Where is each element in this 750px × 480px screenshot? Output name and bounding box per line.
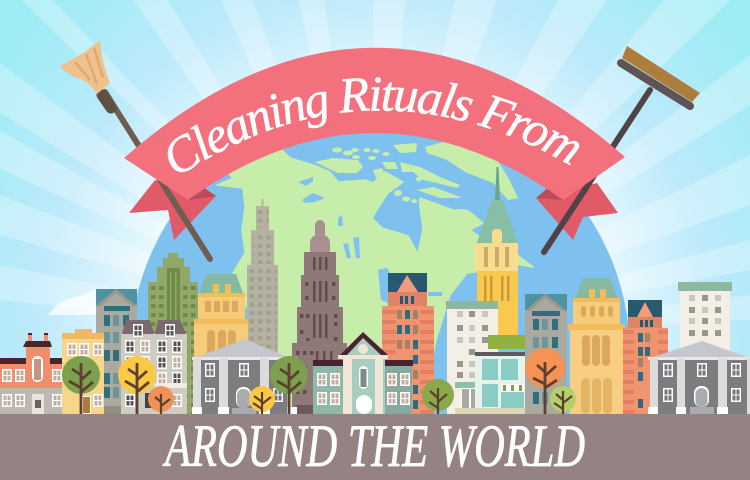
- ribbon tails: [129, 180, 618, 240]
- cloud: [48, 289, 96, 315]
- tree: green 1: [62, 356, 100, 414]
- lakes: [298, 177, 442, 303]
- building: yellow left: [194, 274, 248, 370]
- building: teal gray left: [96, 289, 137, 414]
- ground band: [0, 414, 750, 480]
- banner title: Cleaning Rituals From: [168, 77, 580, 172]
- tree: lime small: [550, 386, 576, 414]
- trees: [62, 348, 576, 414]
- building: yellow right: [568, 278, 625, 414]
- globe: [130, 104, 630, 414]
- house: salmon left: [0, 333, 75, 414]
- building: gray tall tower: [247, 199, 278, 355]
- house: green right wing: [385, 360, 413, 414]
- arctic islands: [315, 143, 462, 203]
- broom right: [544, 46, 700, 252]
- skyline: [0, 167, 750, 414]
- land: greenland: [425, 142, 518, 200]
- house: green left: [313, 360, 345, 414]
- house: yellow left: [62, 329, 104, 414]
- building: brown tower: [292, 220, 347, 414]
- house: townhouse: [121, 320, 187, 414]
- tree: green 2: [270, 356, 308, 414]
- sun rays: [0, 0, 750, 340]
- house: central: [338, 332, 388, 414]
- tree: orange small: [148, 386, 174, 414]
- building: salmon right: [623, 300, 668, 414]
- tree: yellow small: [249, 386, 275, 414]
- building: green tower: [148, 253, 198, 414]
- tree: olive small: [422, 379, 454, 414]
- building: shop: [455, 335, 525, 414]
- building: white building: [446, 301, 498, 414]
- subtitle: AROUND THE WORLD: [162, 413, 585, 479]
- building: yellow spire tower: [475, 167, 518, 341]
- building: white tower right: [678, 282, 732, 356]
- ribbon banner: [124, 48, 625, 200]
- bank right: [648, 341, 750, 414]
- bank left: [192, 339, 297, 414]
- land: north america: [217, 148, 533, 414]
- building: teal gray right: [525, 294, 567, 414]
- broom left: [60, 40, 210, 259]
- building: salmon tower: [382, 273, 434, 414]
- tree: yellow 1: [118, 356, 156, 414]
- tree: orange big: [525, 348, 565, 414]
